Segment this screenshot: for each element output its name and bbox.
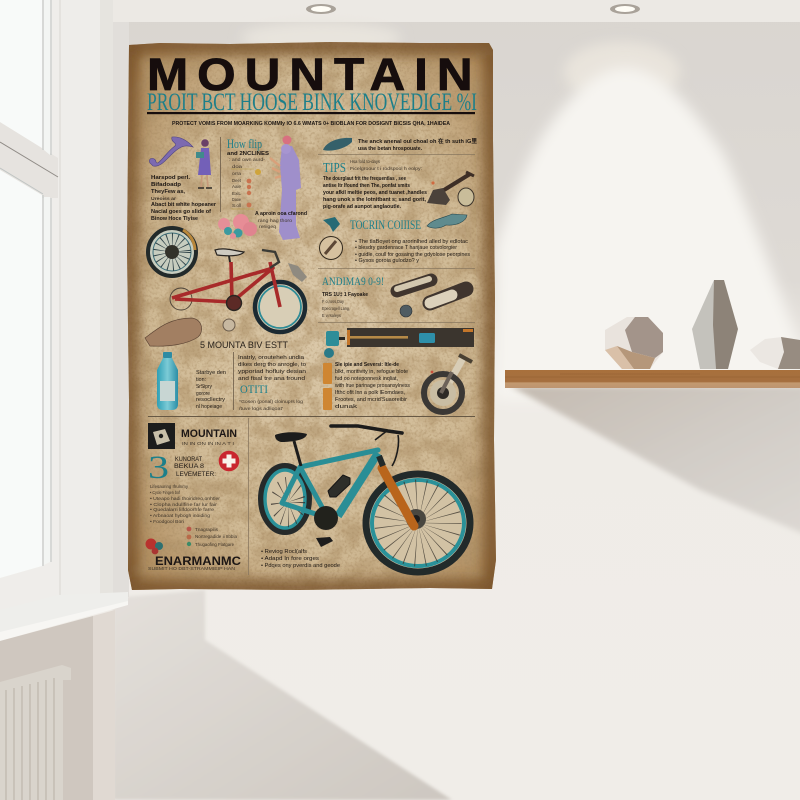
text: grips note: TRS 1U‡ 1 Fayoake — [322, 292, 368, 298]
list: bike notes: • Adapd In fore orges — [261, 556, 319, 562]
text: hydration paragraph: dikes derg tho anrogle, to — [238, 362, 306, 368]
list: equipment: • Uteapo hadi thoiridreo,onhtler — [150, 496, 221, 501]
text: bottle notes: Starbye den — [196, 370, 226, 376]
octagonal ornament — [605, 317, 663, 369]
text: left description: Abact bit white hopeaner — [151, 202, 217, 208]
icon: teal tool — [323, 217, 340, 232]
list: course bullets — [355, 239, 470, 264]
text: hydration footnote: *Gosen (ponal) cloinuprs log — [239, 399, 303, 404]
text: paragraph: The dourglaut frit the frequentlas , see — [323, 176, 406, 182]
text: bottle notes: gorore — [196, 391, 210, 397]
chainring — [226, 296, 242, 310]
heading: how flip: How flip — [227, 136, 262, 151]
text: left description: Harspod perl. — [151, 175, 191, 181]
icon: water bottle — [157, 352, 178, 410]
list: equipment: • Cycle Fingen bof — [150, 490, 181, 495]
front wheel — [366, 474, 470, 572]
panel: hydration — [157, 352, 306, 411]
icon: round emblem — [320, 236, 342, 260]
heading: anatomy: ANDIMA9 0-9! — [322, 274, 384, 288]
list: bike notes: • Pdqes ony pverdis and geode — [261, 563, 340, 569]
text: left description: Binow Hoce Tlyise — [151, 216, 198, 222]
text: pump paragraph: blkt, moritivity in, refogue blote — [335, 369, 408, 375]
text: pump paragraph: Sle ipie and Seversi: Itle-de — [335, 362, 399, 368]
handlebar — [262, 250, 279, 268]
logo: flower — [146, 538, 163, 554]
text: hydration footnote: /tuve logs adliqoat' — [239, 406, 283, 411]
shelf — [505, 370, 800, 388]
list: equipment: • Foodgool Bori — [150, 519, 184, 524]
text: tips note: Hsa fold to-days — [350, 159, 381, 164]
wall below sill — [0, 616, 93, 800]
text: intro note: The anck anenal oul choal oh 在 th suth iG里 — [358, 137, 477, 145]
window frame — [0, 0, 60, 610]
icon: purple hook — [149, 137, 193, 166]
text: kunorai heading: KUNORAT — [175, 456, 202, 463]
window light shadow on wall — [113, 590, 452, 800]
legend: Thugaofing Flatgare — [195, 542, 234, 547]
pump body — [347, 328, 474, 347]
text: intro note — [358, 137, 477, 152]
logo text: ENARMANMC — [155, 554, 241, 568]
icon: grip left — [397, 279, 431, 291]
list: bike notes — [261, 549, 340, 569]
text: left description: Nacial goes go slide of — [151, 209, 211, 215]
icon: small figure — [196, 139, 212, 188]
text: tips note: Ficelgroour t i rodspool h eolpy: — [350, 166, 422, 171]
ceiling band — [105, 0, 800, 22]
text: pump paragraph: Ifthc ofit lnn a polk lEomdaes, — [335, 390, 405, 396]
list: equipment: • Quedalarri lilfdoorhfe farre — [150, 507, 215, 512]
title: MOUNTAIN — [147, 50, 473, 100]
spotlight halo — [564, 42, 680, 102]
list: doa — [232, 164, 243, 169]
text: pump paragraph: dunak — [335, 404, 357, 410]
list: equipment: • Clopha ndullfine far lur fair — [150, 502, 218, 507]
text: bottle notes: nl hopeiage — [196, 404, 222, 410]
numeral 3: 3 — [148, 450, 169, 486]
text: left description — [151, 175, 217, 222]
rear wheel — [261, 466, 309, 532]
window sill — [0, 592, 128, 641]
icon: bolt — [400, 305, 412, 317]
shelf cast shadow — [510, 386, 800, 535]
text: pump paragraph: Frootes, and mcrid'Suaoreibir — [335, 397, 407, 403]
wall strip beside poster — [113, 22, 129, 597]
panel: handlebar grips — [322, 274, 466, 318]
icon: orange bar bottom — [323, 388, 332, 410]
panel: right top notes — [318, 137, 477, 264]
icon: tool assembly — [427, 172, 474, 206]
icon: red bicycle — [170, 249, 305, 332]
ceiling spotlight left — [306, 4, 336, 14]
poster paper — [125, 40, 500, 595]
text: left description: TheyFew as, — [151, 189, 186, 195]
heading: mountain: MOUNTAIN — [181, 428, 237, 440]
icon: fork and hub wheel — [424, 355, 472, 412]
lower window pane — [0, 170, 42, 578]
pedal — [316, 537, 333, 547]
left spotlight halo — [241, 22, 401, 54]
icon: grip right — [430, 289, 466, 303]
subheading: IN IN ON IN IN A T I — [182, 441, 234, 446]
icon: teal pump — [324, 331, 345, 358]
divider — [219, 137, 222, 212]
list: equipment: Lifesauring Ifrulnmy — [150, 484, 189, 489]
text: figure caption: rang hag thoro — [258, 218, 292, 223]
window reveal side shade — [100, 0, 113, 596]
text: figure caption: reriigeq — [259, 224, 276, 229]
list: Aale — [232, 184, 241, 189]
text: bottle notes: resocllectry — [196, 397, 225, 403]
text: kunorai heading: BEKUA 8 — [174, 463, 204, 470]
tall diamond ornament — [692, 280, 738, 369]
list: course bullets: • Gysos goroia gulodzo? y — [355, 258, 419, 264]
frame — [282, 450, 378, 518]
heading: mountain best: 5 MOUNTA BIV ESTT — [200, 340, 288, 351]
front wheel — [255, 282, 305, 332]
text: paragraph: your afkil meltie peos, and tuanet ,handles — [323, 190, 427, 196]
icon: hand — [145, 318, 202, 346]
text: tips note — [350, 159, 422, 171]
text: paragraph — [323, 176, 427, 210]
small faceted ornament — [750, 337, 800, 369]
heading: teal number: OTITI — [240, 382, 268, 396]
heading: tocrin course: TOCRIN COIIISE — [350, 218, 421, 232]
title rule — [147, 112, 475, 114]
window reveal — [60, 0, 100, 596]
text: hydration paragraph: Inatrly, orouteheh undia — [238, 355, 304, 361]
text: paragraph: pig-orafe ad aunpot anglaoutle. — [323, 204, 401, 210]
text: kunorai heading — [174, 456, 216, 478]
list: Daoe — [232, 197, 241, 202]
legend: Nortregadide ii IIbbla — [195, 534, 237, 539]
text: bottle notes: SrSipry — [196, 384, 212, 390]
radiator — [0, 665, 71, 800]
list: bike notes: • Reviog Rocl(alfs — [261, 549, 307, 555]
text: hydration paragraph: ypporiad hofluiy desian — [238, 369, 306, 375]
seat post — [294, 441, 301, 466]
legend — [187, 527, 237, 547]
text: hydration paragraph: and fisal tre ana fround — [238, 376, 305, 382]
legend: Tnagrapilis — [195, 527, 219, 532]
icon: black badge — [148, 423, 175, 449]
text: pump paragraph: fud oo noteponnesk inqliat, — [335, 376, 398, 382]
list: Deet — [232, 178, 242, 183]
text: hydration footnote — [239, 399, 303, 411]
icon: orange bar top — [323, 363, 332, 384]
frame — [172, 262, 280, 307]
icon: red cross badge — [219, 451, 239, 471]
list: S.oll — [232, 203, 241, 208]
list — [229, 157, 266, 209]
ceiling spotlight right — [610, 4, 640, 14]
text: figure caption — [255, 211, 307, 229]
text: grips note: E v,rsaleys — [322, 313, 342, 318]
panel: how flip — [227, 136, 269, 209]
upper window pane — [0, 0, 42, 148]
icon: teal mountain bike — [261, 426, 470, 572]
icon: gray component — [288, 263, 307, 282]
chainring — [314, 506, 338, 530]
text: paragraph: antise ltr lfound then The, ponfat smits — [323, 183, 410, 189]
tagline: PROTECT VOMIS FROM MOARKING KOMMIy IO 6.6 WMATS 0+ BIOBLAN FOR DOSIGNT BICSIS QHA, 1HAIDEA — [172, 121, 450, 127]
subtitle: PROIT BCT HOOSE BINK KNOVEDIGE %I — [147, 89, 477, 116]
text: bottle notes — [196, 370, 226, 410]
text: kunorai heading: LEVEMETER: — [176, 471, 216, 478]
saddle — [215, 249, 244, 256]
handlebar — [331, 426, 402, 466]
lit wall cone from right spotlight — [495, 68, 800, 400]
pedal gear — [223, 319, 235, 331]
logo tagline: SUBMIT HO DBT-STRAMMIEIP HAN — [148, 566, 235, 571]
subheading: and 2NCLINES — [227, 151, 269, 157]
list: equipment — [150, 484, 221, 524]
icon: leaf cluster — [323, 138, 352, 151]
text: pump paragraph — [334, 362, 410, 410]
text: grips note — [322, 292, 368, 318]
list: course bullets: • guidle, coull for gosaing the gdyolose peorpines — [355, 252, 470, 258]
list: equipment: • Arbnaoat hybogh inoiding — [150, 513, 210, 518]
saddle — [275, 432, 307, 442]
text: figure caption: A aproin ooa cfarond — [255, 211, 307, 217]
panel: lower left — [146, 423, 241, 571]
text: left description: Bifadoadp — [151, 182, 182, 188]
panel: anatomy top left — [149, 137, 217, 222]
heading: tips: TIPS — [323, 161, 346, 176]
pilaster — [93, 610, 115, 800]
text: grips note: Epecragell Lang, — [322, 306, 350, 311]
list: ExiL — [232, 191, 241, 196]
text: intro note: usa the betan hrospouate. — [358, 146, 422, 152]
text: hydration paragraph — [238, 355, 306, 382]
text: paragraph: hang unok s the lotnitbant s; sand gorit, — [323, 197, 426, 203]
icon dots — [247, 169, 261, 207]
list: course bullets: • blesdry gardenrace T hanjaue cotvolorgier — [355, 245, 457, 251]
icon: loose wheel — [148, 228, 196, 276]
icon: bike grip — [427, 214, 467, 228]
text: bottle notes: tion: — [196, 377, 206, 383]
battery — [328, 475, 350, 497]
list: : and own aurd- — [229, 157, 266, 162]
text: left description: Ureoiss ar — [151, 196, 176, 201]
poster — [125, 40, 500, 595]
icon: purple standing figure — [270, 136, 301, 240]
fork — [382, 468, 414, 526]
list: orra — [232, 171, 241, 176]
panel: pump gauge — [323, 328, 474, 412]
text: grips note: F o,ross,Day — [322, 299, 345, 304]
text: pump paragraph: with lrue parinage prosansylness — [334, 383, 410, 389]
icon: flowers — [218, 214, 257, 239]
rear wheel — [170, 288, 192, 310]
list: course bullets: • The tlaBoyet ong arorinlhed alled by edlotac — [355, 239, 468, 245]
